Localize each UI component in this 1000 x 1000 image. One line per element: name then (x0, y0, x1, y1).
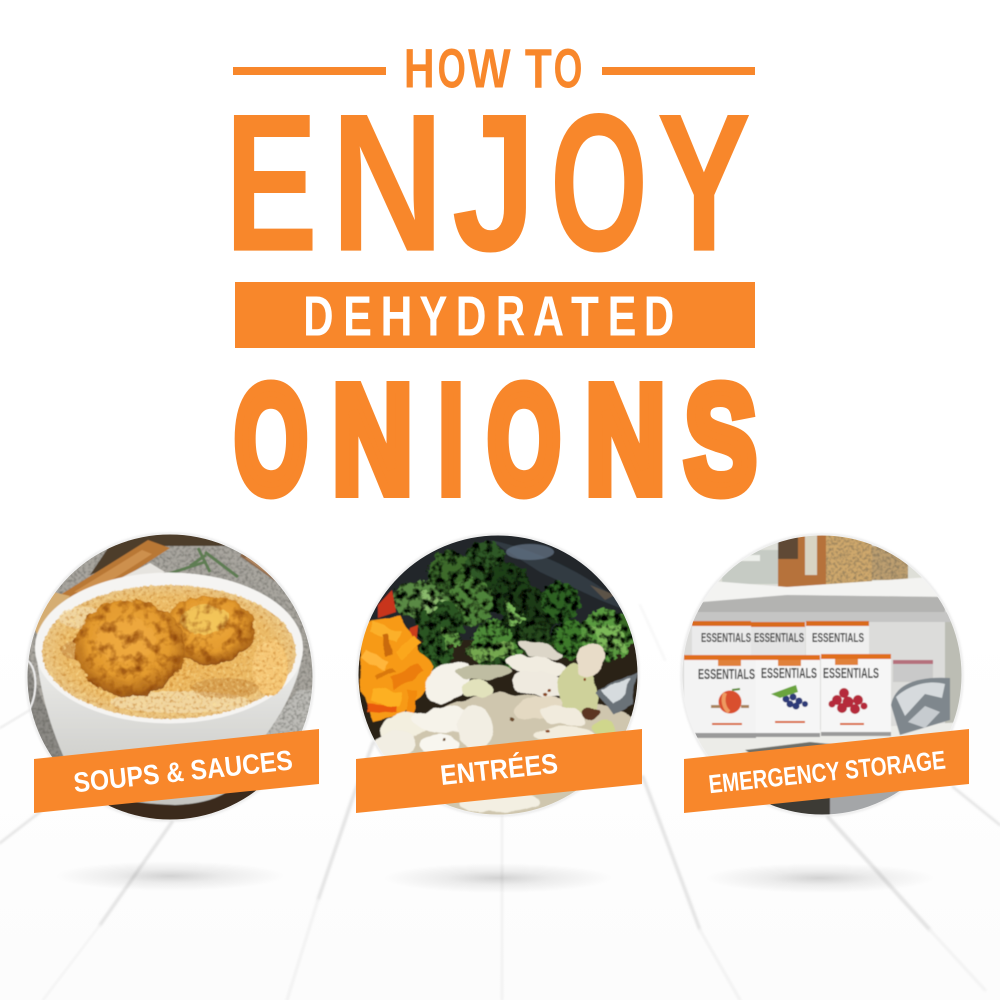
banner: emergency storage (684, 729, 969, 813)
heading: onions: I (439, 355, 463, 525)
heading: enjoy: E (225, 73, 318, 293)
panel: soups and sauces (25, 530, 320, 825)
heading bar: dehydrated: D (303, 286, 334, 349)
heading: enjoy: O (550, 73, 648, 293)
heading bar: dehydrated: R (496, 286, 525, 349)
napkins (28, 667, 63, 757)
photo: pantry shelves with cans: ESSENTIALS (698, 667, 755, 683)
heading: how to: T (525, 37, 552, 99)
panel: emergency storage (680, 530, 969, 820)
heading: onions: N (332, 355, 412, 525)
heading bar: dehydrated: E (343, 286, 372, 349)
heading: how to: W (468, 37, 511, 99)
title rule right (602, 67, 755, 75)
photo: pantry shelves with cans: ESSENTIALS (761, 666, 817, 682)
soup (42, 585, 296, 719)
glass jar (893, 664, 933, 682)
floor shadows (55, 861, 935, 893)
photo: pantry shelves with cans (680, 530, 965, 820)
heading: how to: H (404, 37, 435, 99)
photo: pantry shelves with cans: ESSENTIALS (754, 630, 804, 645)
orange can labels (712, 723, 742, 725)
raspberries (828, 688, 868, 714)
heading: how to: O (554, 37, 582, 99)
lower shelf (698, 722, 953, 756)
photo: vegetables in a pan (355, 530, 645, 820)
photo: onion soup (25, 530, 320, 825)
wooden floor planks (0, 605, 1000, 1000)
heading bar: dehydrated (235, 282, 755, 349)
title (225, 37, 757, 525)
circle shadow ring (26, 534, 314, 820)
heading bar: dehydrated: H (380, 286, 412, 349)
heading: enjoy: J (451, 73, 536, 293)
heading: onions: N (586, 355, 666, 525)
onion pieces (370, 637, 640, 820)
heading: onions: S (684, 355, 756, 525)
heading bar: dehydrated: D (456, 286, 486, 349)
photo: pantry shelves with cans: ESSENTIALS (701, 630, 751, 645)
bowl body (36, 648, 303, 805)
banner: entrees (356, 729, 642, 813)
front row cans (684, 656, 756, 738)
heading: onions: O (234, 355, 308, 525)
banner: entrees: ENTRÉES (439, 748, 559, 791)
photo: pantry shelves with cans: ESSENTIALS (823, 666, 879, 682)
heading bar: dehydrated: Y (419, 286, 447, 349)
heading bar: dehydrated: A (533, 286, 564, 349)
red pepper (378, 590, 396, 618)
heading: enjoy: N (330, 73, 444, 293)
back row cans (692, 626, 751, 656)
banner: soups and sauces (34, 729, 319, 813)
heading: how to: O (438, 37, 466, 99)
heading: onions: O (488, 355, 560, 525)
top shelf jars (722, 550, 778, 584)
panel: entrees (355, 530, 645, 820)
rosemary sprig (168, 548, 238, 577)
circle shadow ring (358, 534, 638, 816)
heading bar: dehydrated: D (644, 286, 674, 349)
photo: pantry shelves with cans: ESSENTIALS (812, 630, 864, 645)
banner: soups and sauces: SOUPS & SAUCES (72, 744, 294, 798)
heading: enjoy: Y (657, 73, 751, 293)
broccoli (392, 541, 641, 675)
bread slices (75, 596, 255, 696)
top shelf board (704, 578, 938, 602)
blueberries (782, 694, 808, 710)
heading bar: dehydrated: T (571, 286, 599, 349)
orange peppers (360, 616, 432, 722)
title rule left (233, 67, 386, 75)
circle shadow ring (682, 534, 962, 816)
apple (718, 690, 742, 714)
bowl rim (35, 572, 303, 724)
table (28, 546, 312, 711)
heading bar: dehydrated: E (608, 286, 636, 349)
